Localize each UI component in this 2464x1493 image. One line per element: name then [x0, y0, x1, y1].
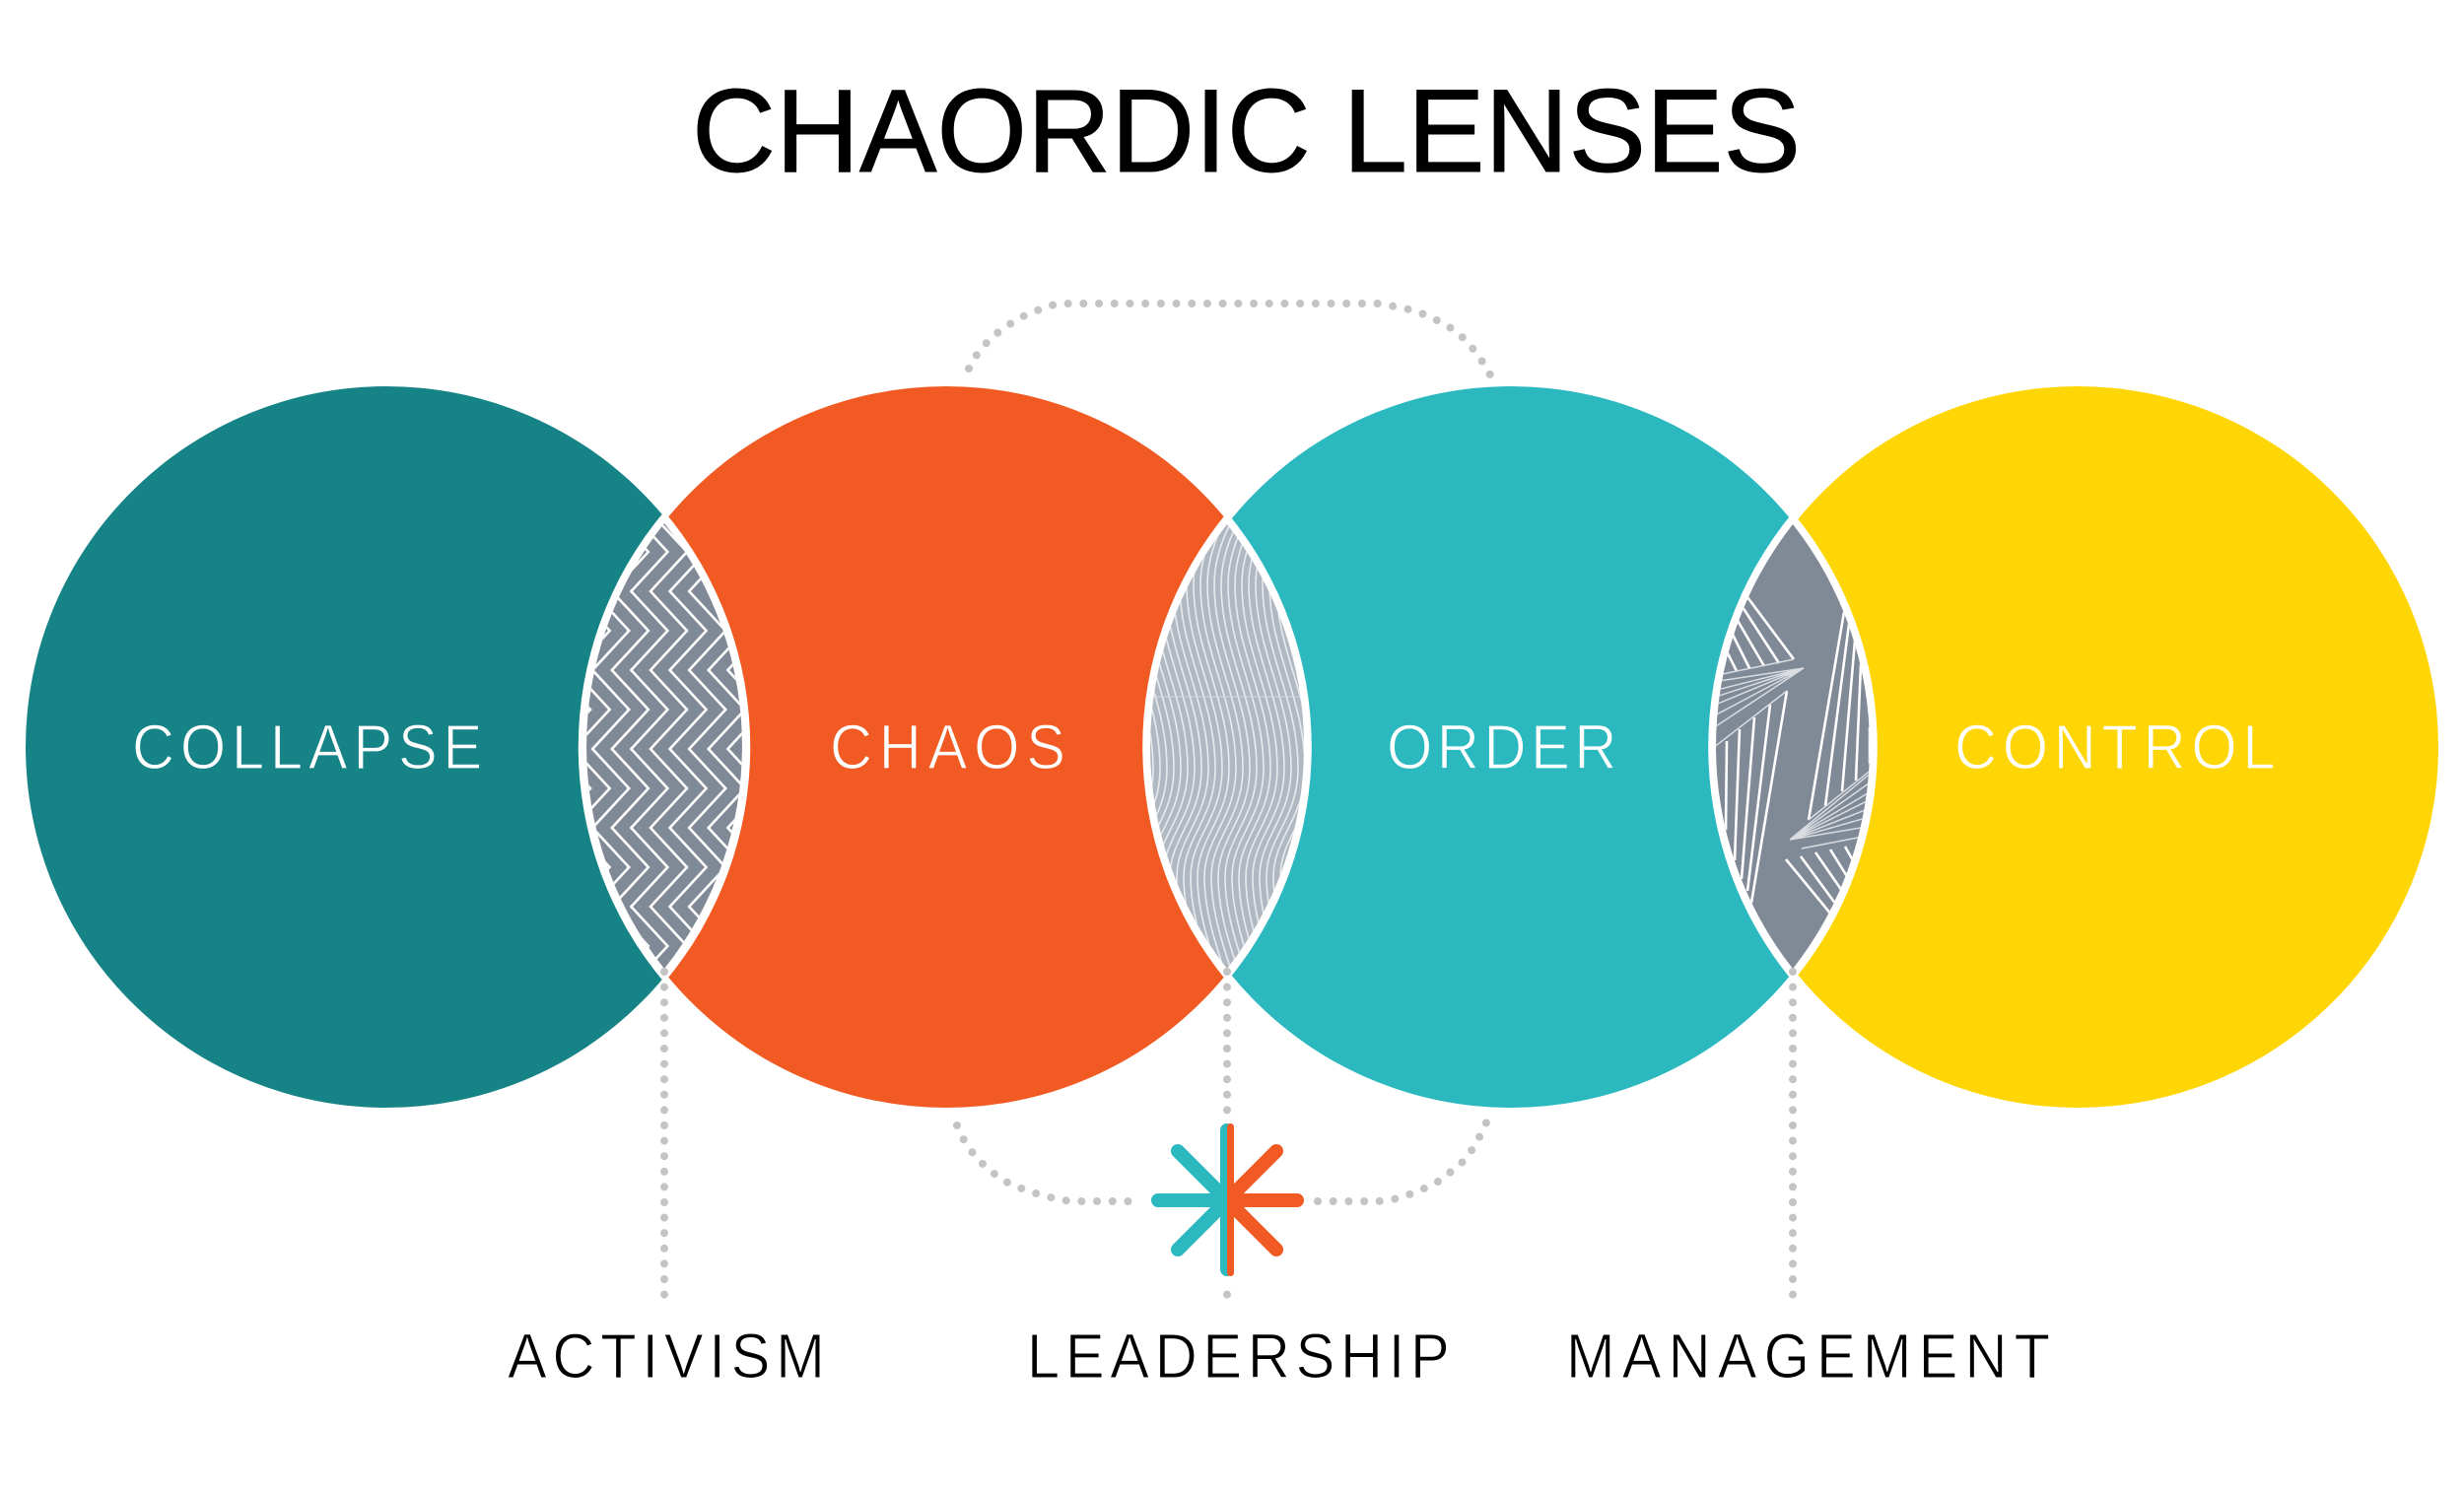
- lens: activism chevrons: [578, 514, 751, 980]
- lens: management lines: [1708, 516, 1878, 978]
- title: CHAORDIC LENSES: [692, 65, 1801, 197]
- label: leadership: LEADERSHIP: [1027, 1322, 1450, 1391]
- circle: collapse: [26, 386, 747, 1108]
- circle: order: [1150, 386, 1872, 1108]
- label: activism: ACTIVISM: [508, 1322, 825, 1391]
- dotted arc: bottom right connector: [1318, 1120, 1487, 1201]
- label: control: CONTROL: [1954, 713, 2276, 782]
- dotted line: activism: [660, 972, 668, 1297]
- label: management: MANAGEMENT: [1566, 1322, 2050, 1391]
- label: order: ORDER: [1387, 713, 1616, 782]
- lens: leadership waves: [1142, 516, 1312, 978]
- dotted arc: bottom left connector: [957, 1125, 1134, 1201]
- label: collapse: COLLAPSE: [132, 713, 482, 782]
- icon: star of chaos and order: [1148, 1119, 1306, 1287]
- circle: control: [1717, 386, 2438, 1108]
- dotted arc: top connector: [969, 304, 1492, 378]
- dotted line: leadership: [1223, 972, 1231, 1297]
- circle: chaos: [585, 386, 1307, 1108]
- label: chaos: CHAOS: [830, 713, 1065, 782]
- dotted line: management: [1789, 972, 1797, 1297]
